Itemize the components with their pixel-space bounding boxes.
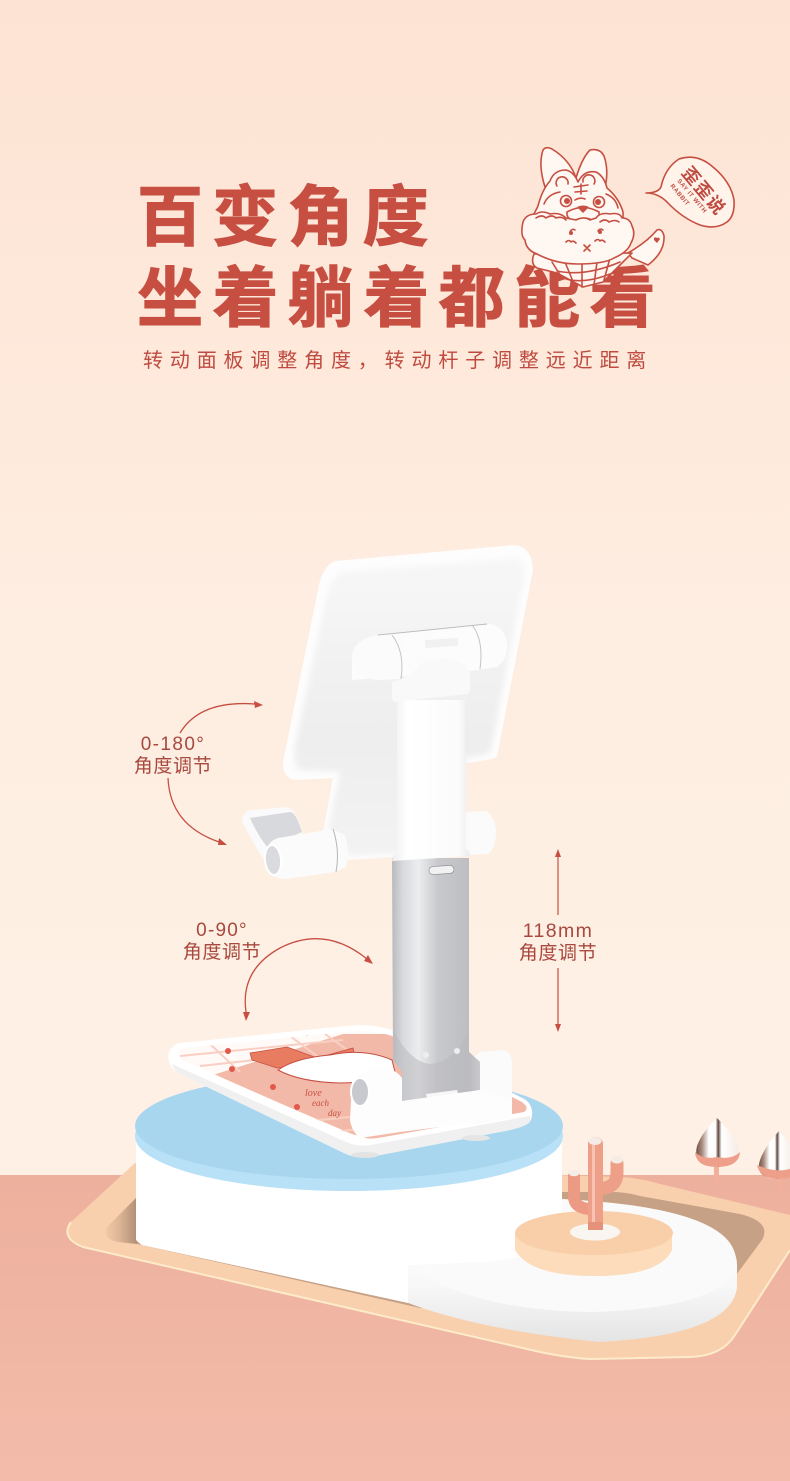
lower metal pole — [392, 858, 480, 1101]
printed card artwork: love — [305, 1088, 322, 1099]
phone clip — [242, 807, 306, 872]
label: 118mm height — [519, 920, 597, 964]
small white stepped disc — [408, 1199, 737, 1342]
printed card artwork: day — [328, 1108, 341, 1118]
arrow: vertical height lower — [555, 968, 561, 1032]
metal spike ornaments — [695, 1118, 790, 1197]
arrow: 0-90 arc — [243, 939, 373, 1021]
label: 0-180 degrees rotation — [134, 734, 212, 777]
cactus ornament — [568, 1137, 623, 1240]
speech bubble: SAY IT WITH — [675, 178, 708, 215]
printed card artwork: each — [312, 1098, 329, 1108]
arrow: 0-180 lower arc — [168, 778, 227, 845]
tray: outer frame — [67, 1163, 790, 1359]
label: 0-180 degrees rotation: 角度调节 — [134, 755, 212, 777]
right side stub — [462, 811, 496, 855]
label: 118mm height: 118mm — [523, 920, 593, 942]
base plate — [168, 1025, 535, 1158]
title: 百变角度 — [137, 180, 438, 254]
label: 0-90 degrees rotation: 0-90° — [196, 920, 248, 941]
T hinge head — [352, 624, 507, 702]
clip cylinder — [263, 829, 348, 879]
tablet panel — [283, 545, 533, 860]
label: 0-90 degrees rotation — [183, 920, 261, 963]
arrow: 0-180 upper arc — [180, 701, 263, 733]
speech bubble: RABBIT — [668, 183, 691, 207]
label: 118mm height: 角度调节 — [519, 942, 597, 964]
phone stand — [168, 545, 535, 1158]
label: 0-90 degrees rotation: 角度调节 — [183, 941, 261, 963]
right hinge block — [473, 1050, 512, 1124]
printed card artwork — [180, 1034, 526, 1139]
speech bubble — [646, 157, 734, 227]
blue disc — [135, 1073, 563, 1191]
tray: left recess wall — [106, 1198, 137, 1244]
tray front rim highlight — [67, 1222, 790, 1359]
title — [137, 180, 665, 335]
subtitle: 转动面板调整角度，转动杆子调整远近距离 — [143, 349, 653, 372]
title: 坐着躺着都能看 — [137, 261, 665, 335]
large white cylinder — [136, 1142, 562, 1303]
upper white post — [392, 700, 470, 861]
speech bubble: 歪歪说 — [678, 163, 730, 219]
arrow: vertical height upper — [555, 849, 561, 915]
tray: recess — [136, 1192, 764, 1308]
mascot: tiger-hood rabbit — [522, 148, 664, 287]
base front block and left hinge — [350, 1067, 512, 1138]
floor — [0, 1175, 790, 1481]
label: 0-180 degrees rotation: 0-180° — [141, 734, 205, 755]
peach disc — [515, 1211, 673, 1276]
